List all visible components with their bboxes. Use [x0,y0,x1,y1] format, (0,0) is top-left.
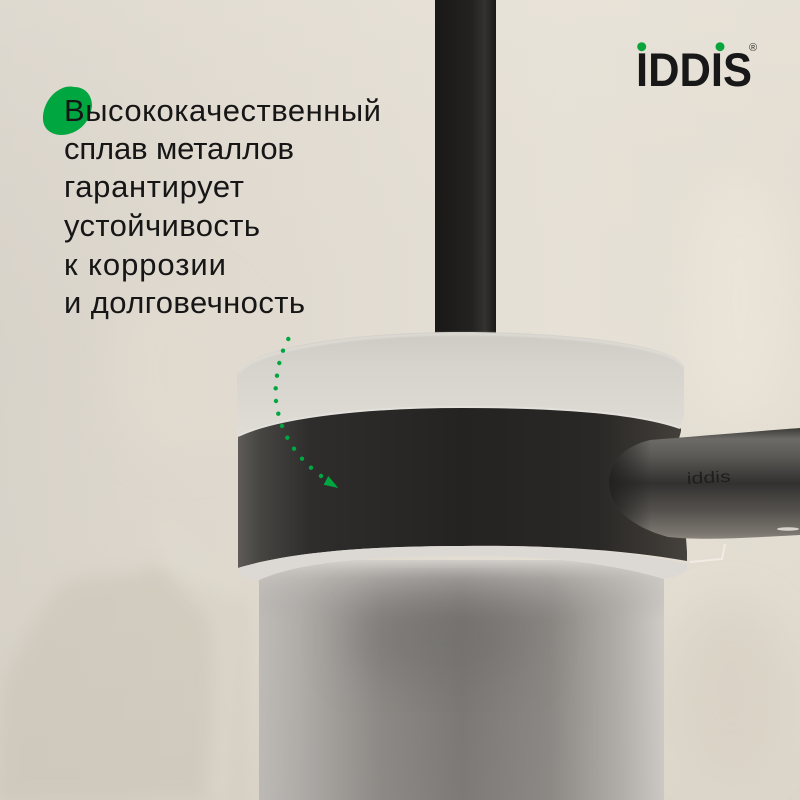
text block: product claim [64,93,381,320]
text block: product claim: сплав металлов [64,131,294,166]
dotted arrow [274,337,338,488]
text block: product claim: и долговечность [64,285,305,320]
arm: wall-mounted holder [609,428,800,539]
engraved arm logo: iddis [686,469,731,488]
text block: product claim: Высококачественный [64,93,381,128]
text block: product claim: к коррозии [64,247,226,282]
text block: product claim: гарантирует [64,169,244,204]
black metal band [238,407,687,568]
green blob behind first letter [43,87,92,135]
frosted top ring [237,332,684,440]
logo: IDDIS: ® [749,42,757,54]
text block: product claim: устойчивость [64,208,260,243]
logo: IDDIS: IDDIS [636,43,752,96]
wall bracket outline [690,544,725,562]
cup lip under band [238,546,687,580]
glass brush holder cup [259,560,664,800]
pole: vertical black handle [435,0,496,334]
